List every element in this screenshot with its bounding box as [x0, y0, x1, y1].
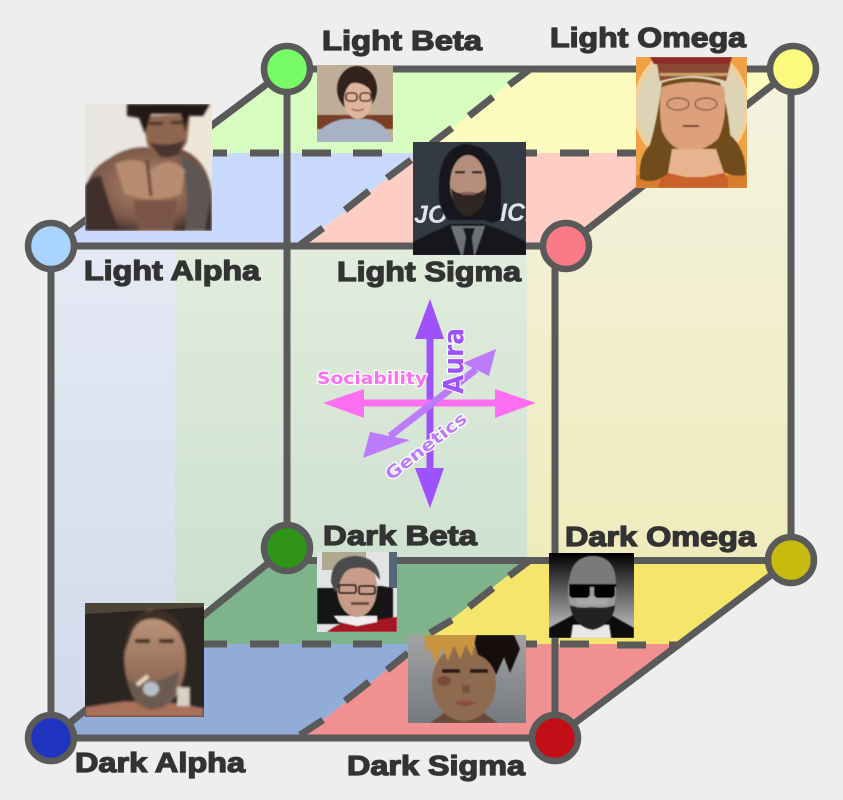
axis label: Genetics: Genetics — [382, 409, 471, 485]
label: Light Sigma: Light Sigma — [337, 256, 521, 287]
node: Dark Omega — [768, 537, 814, 583]
portrait: Dark Beta — [317, 552, 397, 632]
bottom face: dark types — [51, 560, 791, 738]
dashed face dividers — [204, 70, 680, 735]
axis label: Sociability: Sociability — [317, 369, 427, 389]
portrait: Light Alpha — [85, 104, 212, 231]
portrait: Light Sigma: JO — [414, 201, 448, 229]
label: Dark Omega: Dark Omega — [565, 521, 756, 552]
portrait: Light Beta — [317, 65, 393, 142]
label: Light Alpha: Light Alpha — [84, 255, 260, 286]
node: Dark Beta — [264, 525, 310, 571]
node: Light Alpha — [28, 223, 74, 269]
arrow: aura axis — [415, 299, 444, 508]
label: Light Omega: Light Omega — [550, 22, 746, 53]
node: Light Beta — [264, 46, 310, 92]
back faces of the cube — [55, 69, 793, 738]
node: Dark Sigma — [532, 715, 578, 761]
top face: light types — [51, 69, 793, 246]
portrait: Light Sigma: ICK — [500, 199, 545, 227]
label: Dark Beta: Dark Beta — [323, 520, 477, 551]
portrait: Light Omega — [636, 57, 747, 188]
node: Dark Alpha — [28, 715, 74, 761]
axis label: Aura: Aura — [437, 328, 470, 394]
arrow: sociability axis — [323, 389, 536, 418]
label: Dark Alpha: Dark Alpha — [75, 747, 245, 778]
label: Light Beta: Light Beta — [322, 25, 482, 56]
cube edges — [51, 69, 793, 738]
portrait: Dark Sigma — [408, 635, 526, 723]
arrow: genetics axis — [363, 349, 496, 458]
portrait: Dark Omega — [549, 553, 634, 638]
node: Light Sigma — [543, 223, 589, 269]
portrait: Dark Alpha — [85, 603, 204, 717]
axes diagram — [317, 299, 536, 508]
node: Light Omega — [770, 46, 816, 92]
label: Dark Sigma: Dark Sigma — [347, 750, 525, 781]
portrait: Light Sigma — [413, 142, 545, 255]
